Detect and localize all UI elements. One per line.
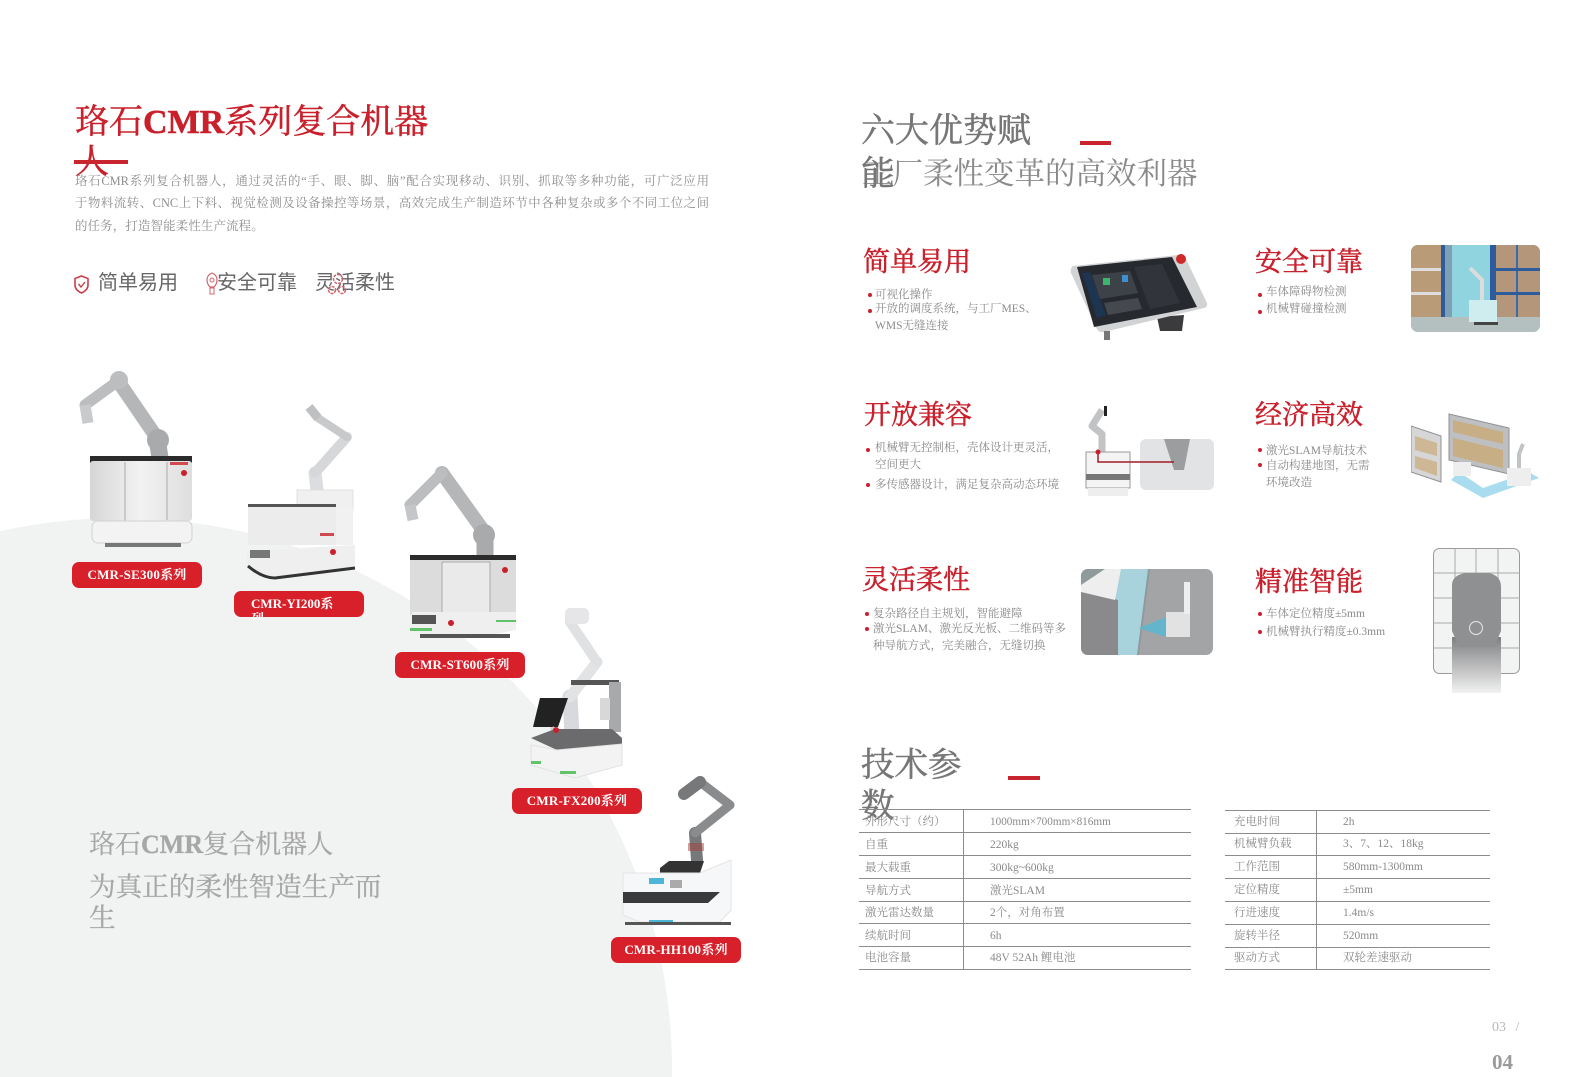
title accent bar [74,160,128,164]
table: left specs: 48V 52Ah 鲤电池 [990,952,1075,964]
image: control tablet [1070,254,1208,340]
intro paragraph [75,174,709,233]
table: left specs: 导航方式 [865,885,911,897]
intro paragraph: 于物料流转、CNC上下料、视觉检测及设备操控等场景，高效完成生产制造环节中各种复杂或多个不同工位之间 [75,196,709,210]
heading: six advantages: 工厂柔性变革的高效利器 [862,157,1198,191]
image: open cabinet diagram [1086,406,1214,496]
feature: flexible: 复杂路径自主规划，智能避障 [873,608,1022,620]
label: YI200 [234,591,364,620]
table: right specs: 1.4m/s [1343,907,1374,919]
feature: flexible: 激光SLAM、激光反光板、二维码等多 [873,623,1066,635]
table: left specs [859,809,1191,970]
feature: precise and smart: 车体定位精度±5mm [1266,608,1365,620]
table: left specs: 300kg~600kg [990,862,1054,874]
table: right specs: 双轮差速驱动 [1343,952,1412,964]
feature: easy to use [863,247,1208,340]
feature: safe and reliable [1255,247,1363,315]
intro paragraph: 珞石CMR系列复合机器人，通过灵活的“手、眼、脚、脑”配合实现移动、识别、抓取等多种功能，可广泛应用 [75,174,709,188]
table: right specs: 定位精度 [1234,884,1280,896]
table: right specs: 3、7、12、18kg [1343,838,1424,850]
feature: economical and efficient: 自动构建地图，无需 [1266,460,1370,472]
feature: easy to use: WMS无缝连接 [875,320,948,332]
feature: safe and reliable: 安全可靠 [1255,247,1363,277]
heading: technical parameters: 技术参数 [861,747,962,825]
robot: CMR-HH100 [623,782,731,925]
image: warehouse shelves map [1411,413,1539,498]
feature: flexible: 灵活柔性 [862,565,970,595]
feature: open and compatible: 机械臂无控制柜，壳体设计更灵活， [875,442,1059,454]
image: robot on grid [1433,548,1520,693]
label: YI200: CMR-YI200系 [251,596,333,611]
page number 03: 03 / [1492,1020,1519,1035]
label: HH100: CMR-HH100系列 [624,942,728,957]
intro paragraph: 的任务，打造智能柔性生产流程。 [75,219,264,233]
title: 珞石CMR系列复合机器人 [75,104,428,181]
robot: CMR-SE300 [85,371,192,547]
robot: CMR-ST600 [410,473,516,638]
table: left specs: 1000mm×700mm×816mm [990,816,1111,828]
page number 04: 04 [1492,1050,1513,1074]
feature: economical and efficient [1255,400,1539,498]
label: ST600 [395,652,525,678]
table: left specs: 自重 [865,839,888,851]
feature: open and compatible: 空间更大 [875,459,921,471]
table: right specs: 机械臂负载 [1234,838,1292,850]
table: right specs: 2h [1343,816,1354,828]
table: left specs: 激光雷达数量 [865,907,934,919]
feature: open and compatible [864,400,1214,496]
feature: easy to use: 可视化操作 [875,289,932,301]
heading: six advantages [861,112,1198,193]
feature: precise and smart: 机械臂执行精度±0.3mm [1266,626,1385,638]
robot: CMR-YI200 [247,407,355,578]
label: SE300 [72,562,202,588]
feature: easy to use: 开放的调度系统，与工厂MES、 [875,303,1037,315]
label: FX200 [512,788,642,814]
table: right specs [1225,810,1490,970]
table: left specs: 续航时间 [865,930,911,942]
feature: economical and efficient: 环境改造 [1266,477,1312,489]
table: left specs: 220kg [990,839,1019,851]
icon: shield [74,275,89,294]
table: right specs: 工作范围 [1234,861,1280,873]
robot: CMR-FX200 [531,608,622,778]
feature: economical and efficient: 激光SLAM导航技术 [1266,445,1367,457]
table: left specs: 6h [990,930,1002,942]
icon: gears [328,274,346,294]
feature: easy to use: 简单易用 [863,247,971,277]
table: right specs: 行进速度 [1234,907,1280,919]
table: left specs: 电池容量 [865,952,911,964]
heading accent bar [1080,141,1111,145]
feature tags [74,272,395,294]
feature: precise and smart [1255,567,1385,638]
table: right specs: 520mm [1343,930,1378,942]
feature: flexible: 种导航方式，完美融合，无缝切换 [873,640,1046,652]
table: right specs: 驱动方式 [1234,952,1280,964]
heading: six advantages: 六大优势赋 [861,113,1031,150]
label: FX200: CMR-FX200系列 [527,793,627,808]
feature: open and compatible: 开放兼容 [864,400,972,430]
heading: six advantages: 能 [861,156,895,193]
heading accent bar [1008,776,1040,780]
feature: flexible [862,565,1066,652]
table: left specs: 最大载重 [865,862,911,874]
label: HH100 [611,937,741,963]
slogan: 珞石CMR复合机器人 [89,830,333,859]
tag: flexible: 灵活柔性 [315,272,395,294]
slogan [89,830,382,933]
feature: open and compatible: 多传感器设计，满足复杂高动态环境 [875,479,1059,491]
label: SE300: CMR-SE300系列 [88,567,186,582]
image: warehouse safety [1411,245,1540,332]
slogan: 为真正的柔性智造生产而 [89,872,382,902]
feature: safe and reliable: 机械臂碰撞检测 [1266,303,1346,315]
label: ST600: CMR-ST600系列 [410,657,509,672]
table: left specs: 激光SLAM [990,885,1045,897]
tag: easy to use: 简单易用 [98,272,178,294]
slogan: 生 [89,903,116,933]
table: left specs: 外形尺寸（约） [865,816,946,828]
table: right specs: ±5mm [1343,884,1373,896]
feature: safe and reliable: 车体障碍物检测 [1266,286,1346,298]
feature: precise and smart: 精准智能 [1255,567,1363,597]
icon: bulb [206,272,218,294]
table: right specs: 580mm-1300mm [1343,861,1423,873]
table: right specs: 旋转半径 [1234,930,1280,942]
feature: economical and efficient: 经济高效 [1255,400,1363,430]
image: warehouse aisle [1081,569,1213,655]
table: right specs: 充电时间 [1234,816,1280,828]
table: left specs: 2个，对角布置 [990,907,1065,919]
tag: safe and reliable: 安全可靠 [217,272,297,294]
